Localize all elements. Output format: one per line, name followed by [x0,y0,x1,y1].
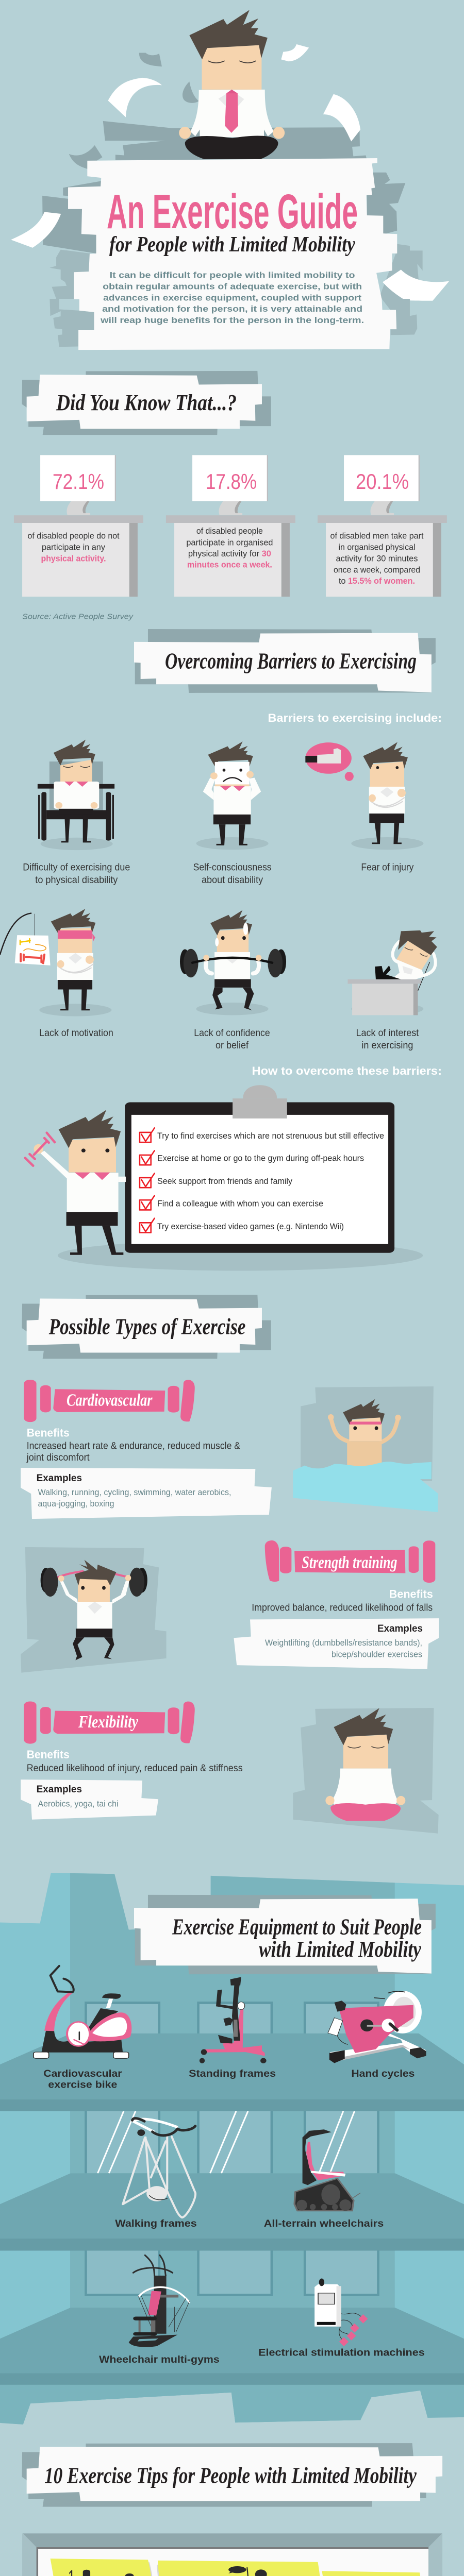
equipment: walking frame [115,2119,197,2229]
barrier: fear of injury [305,742,423,873]
equipment: electrical stimulation machine [258,2279,425,2359]
panel: statistic 17.8%: physical activity for 30 [188,549,271,558]
panel: statistic 72.1%: of disabled people do not [28,531,120,540]
intro text block: will reap huge benefits for the person in the long-term. [100,315,364,325]
note 1 [51,2558,155,2576]
panel: strength training: Weightlifting (dumbbells/resistance bands), [265,1638,422,1648]
heading: possible types [22,1295,271,1359]
equipment: electrical stimulation machine: Electrical stimulation machines [258,2348,425,2359]
panel: statistic 20.1%: of disabled men take part [330,531,424,540]
barrier: self-consciousness: Self-consciousness [193,862,272,873]
heading: exercise equipment: with Limited Mobility [259,1937,421,1962]
panel: cardiovascular: Cardiovascular [67,1391,153,1410]
barrier: lack of interest: Lack of interest [356,1028,419,1039]
barrier: lack of motivation: Lack of motivation [39,1028,113,1039]
panel: statistic 20.1%: once a week, compared [334,565,420,575]
checklist items: Find a colleague with whom you can exercise [157,1198,323,1209]
panel: cardiovascular: Benefits [27,1427,70,1439]
panel: cardiovascular [21,1380,272,1519]
panel: strength training: Strength training [302,1553,397,1572]
subheading: barriers: Barriers to exercising include: [268,711,442,724]
intro text block: obtain regular amounts of adequate exercise, but with [103,281,362,292]
panel: gym background [0,1869,464,2442]
checklist items: Try exercise-based video games (e.g. Nintendo Wii) [157,1222,344,1231]
barrier: physical disability: to physical disability [35,875,118,886]
panel: statistic 17.8%: minutes once a week. [187,560,272,570]
barrier: lack of motivation [0,909,113,1039]
checklist items: Exercise at home or go to the gym during off-peak hours [157,1153,364,1163]
heading: overcoming barriers [134,629,436,693]
panel: statistic 20.1% [318,455,447,597]
panel: statistic 17.8% [166,455,295,597]
panel: strength training: Benefits [389,1588,433,1601]
panel: strength training: Examples [377,1623,423,1634]
panel: flexibility: Benefits [27,1748,70,1761]
heading: did you know: Did You Know That...? [56,390,237,415]
panel: flexibility: Examples [37,1784,82,1795]
equipment: exercise bike: Cardiovascular [43,2069,122,2079]
panel: statistic 72.1%: 72.1% [53,469,104,494]
equipment: hand cycle [328,1991,426,2079]
panel: clipboard checklist with man [25,1085,423,1270]
illustration: swimmer [293,1386,438,1512]
equipment: standing frame [189,1977,276,2079]
barrier: lack of interest [347,930,437,1051]
equipment: standing frame: Standing frames [189,2069,276,2079]
panel: notice board frame [22,2533,442,2576]
illustration: weightlifter [21,1547,167,1673]
barrier: lack of confidence [180,910,286,1051]
illustration: yoga man [293,1708,439,1834]
panel: cardiovascular: Increased heart rate & endurance, reduced muscle & [27,1441,240,1452]
equipment: hand cycle: Hand cycles [351,2069,415,2079]
subheading: how to overcome: How to overcome these barriers: [252,1064,442,1077]
barrier: self-consciousness: about disability [202,875,263,886]
illustration: meditating man [179,10,285,159]
panel: flexibility [21,1701,243,1820]
panel: cardiovascular: Walking, running, cycling, swimming, water aerobics, [38,1487,231,1497]
panel: statistic 72.1%: participate in any [42,542,105,552]
panel: statistic 17.8%: 17.8% [206,469,257,494]
panel: statistic 72.1% [14,455,143,597]
panel: strength training [234,1540,439,1669]
panel: statistic 17.8%: participate in organised [186,537,273,547]
intro text block: and motivation for the person, it is very attainable and [102,304,362,314]
equipment: wheelchair multi-gym: Wheelchair multi-gyms [99,2354,220,2365]
panel: statistic 20.1%: activity for 30 minutes [336,554,418,564]
equipment: all-terrain wheelchair: All-terrain wheelchairs [264,2218,384,2229]
equipment: all-terrain wheelchair [264,2129,384,2229]
equipment: walking frame: Walking frames [115,2218,197,2229]
panel: statistic 17.8%: of disabled people [196,526,263,536]
panel: strength training: Improved balance, reduced likelihood of falls [252,1602,433,1613]
intro text block: It can be difficult for people with limited mobility to [110,270,355,280]
barrier: fear of injury: Fear of injury [361,862,414,873]
intro text block: advances in exercise equipment, coupled with support [103,293,361,303]
equipment: exercise bike: exercise bike [48,2080,117,2091]
source note: Source: Active People Survey [22,612,134,621]
panel: statistic 20.1%: to 15.5% of women. [339,576,415,586]
intro text block [100,270,364,325]
heading: did you know [22,371,271,435]
panel: statistic 20.1%: 20.1% [356,469,409,494]
barrier: self-consciousness [193,741,272,886]
heading: possible types: Possible Types of Exercise [48,1314,245,1339]
checklist items: Try to find exercises which are not strenuous but still effective [157,1131,384,1141]
panel: flexibility: Aerobics, yoga, tai chi [38,1799,119,1809]
barrier: physical disability: Difficulty of exercising due [23,862,130,873]
barrier: lack of confidence: or belief [216,1040,249,1051]
panel: statistic 72.1%: physical activity. [41,554,106,564]
equipment: wheelchair multi-gym [99,2255,220,2365]
barrier: physical disability [23,740,130,886]
note 2 [157,2561,322,2576]
checklist items: Seek support from friends and family [157,1176,292,1186]
panel: statistic 20.1%: in organised physical [338,542,416,552]
equipment: exercise bike [34,1966,131,2091]
panel: cardiovascular: aqua-jogging, boxing [38,1499,114,1509]
barrier: lack of interest: in exercising [361,1040,413,1051]
note 3 [320,2571,427,2576]
heading: 10 exercise tips [22,2443,442,2507]
panel: flexibility: Reduced likelihood of injury, reduced pain & stiffness [27,1763,243,1774]
subtitle: for People with Limited Mobility [109,233,355,257]
panel: flexibility: Flexibility [78,1713,139,1732]
barrier: lack of confidence: Lack of confidence [194,1028,270,1039]
panel: strength training: bicep/shoulder exercises [332,1649,422,1659]
header paper pile [11,44,449,350]
panel: cardiovascular: Examples [37,1473,82,1484]
heading: exercise equipment [134,1895,436,1974]
checklist items [157,1131,384,1231]
panel: cardiovascular: joint discomfort [26,1452,90,1463]
